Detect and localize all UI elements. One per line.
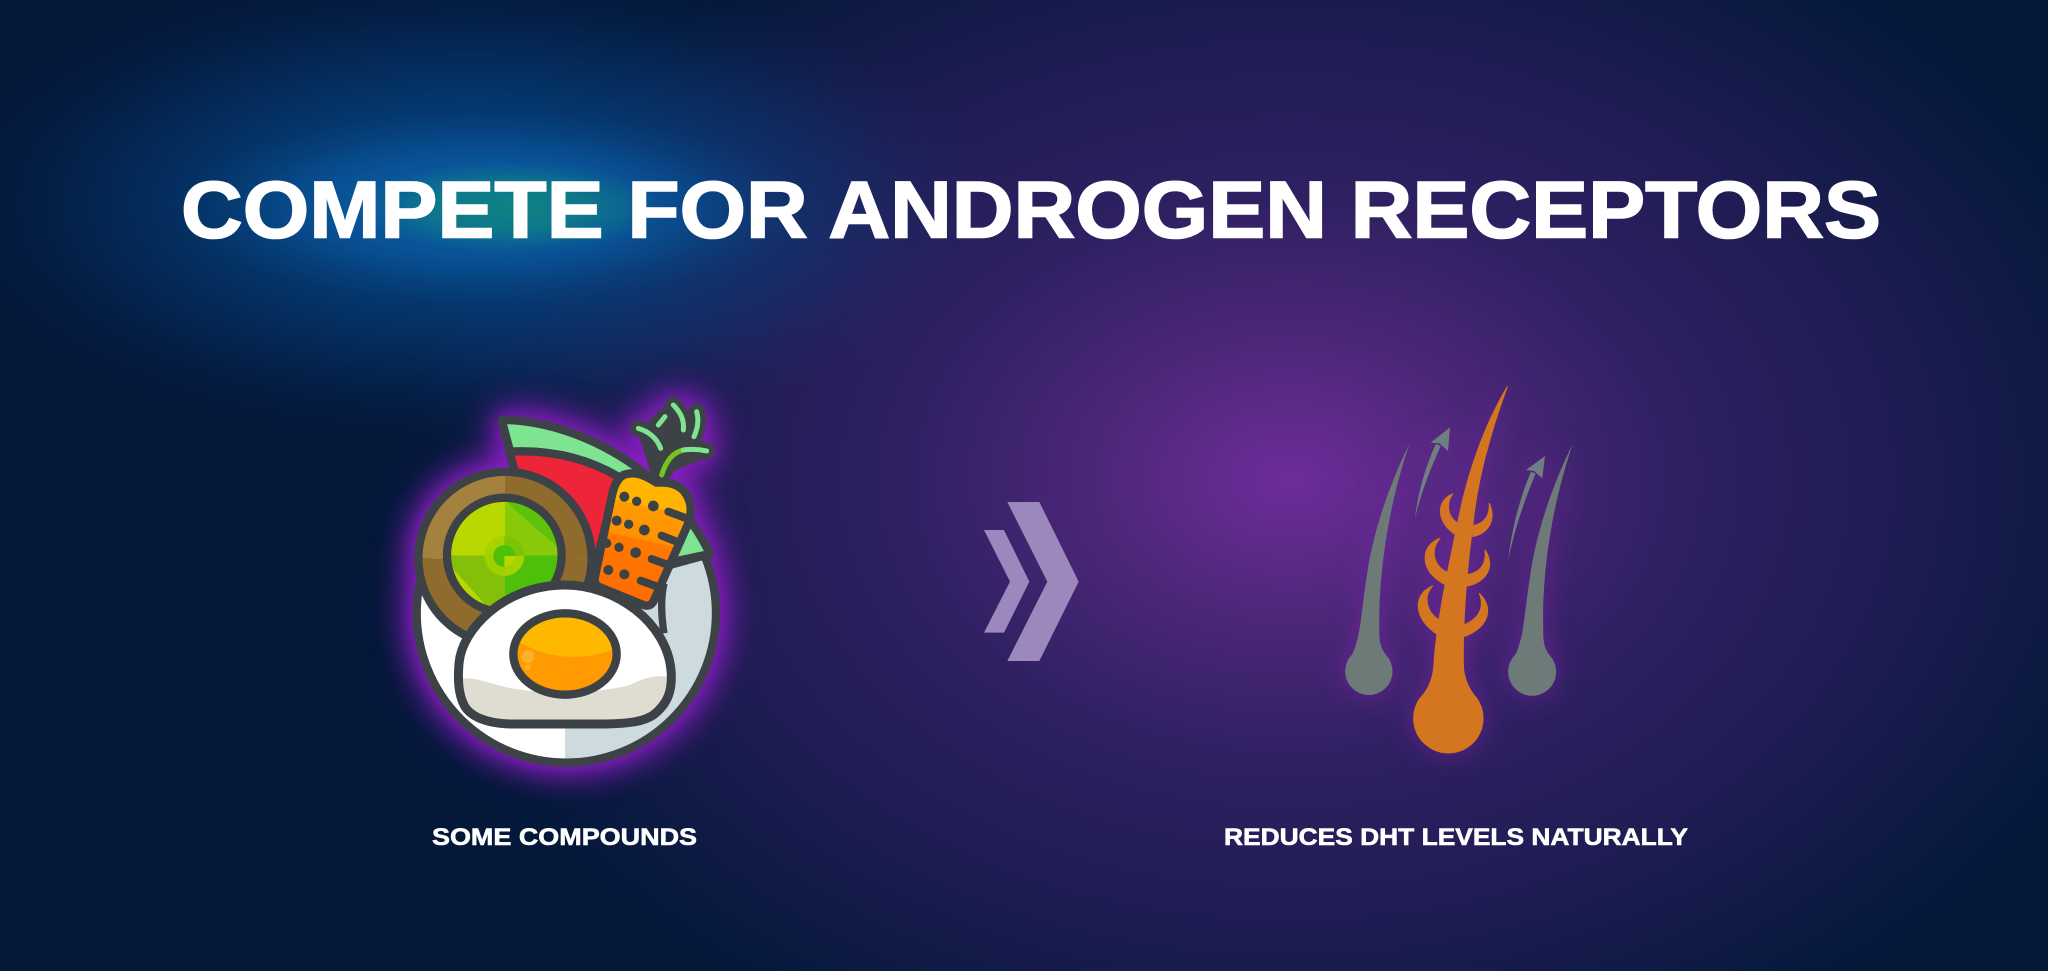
fried egg — [457, 585, 677, 730]
title: COMPETE FOR ANDROGEN RECEPTORS — [181, 166, 1881, 256]
arrow: double chevron — [984, 502, 1079, 661]
left growth arrow — [1415, 427, 1450, 518]
carrot — [595, 473, 691, 606]
right grey hair — [1508, 444, 1573, 696]
label: reduces DHT: REDUCES DHT LEVELS NATURALLY — [1224, 824, 1688, 851]
left grey hair — [1345, 444, 1409, 695]
right growth arrow — [1508, 456, 1545, 560]
central orange hair — [1414, 387, 1507, 753]
icon: hair follicles — [1345, 387, 1573, 753]
label: some compounds: SOME COMPOUNDS — [432, 824, 697, 851]
carrot leaves — [638, 403, 710, 477]
plate — [417, 463, 716, 763]
kiwi — [418, 472, 592, 645]
melon wedge — [502, 420, 710, 633]
icon: food plate — [417, 403, 716, 763]
